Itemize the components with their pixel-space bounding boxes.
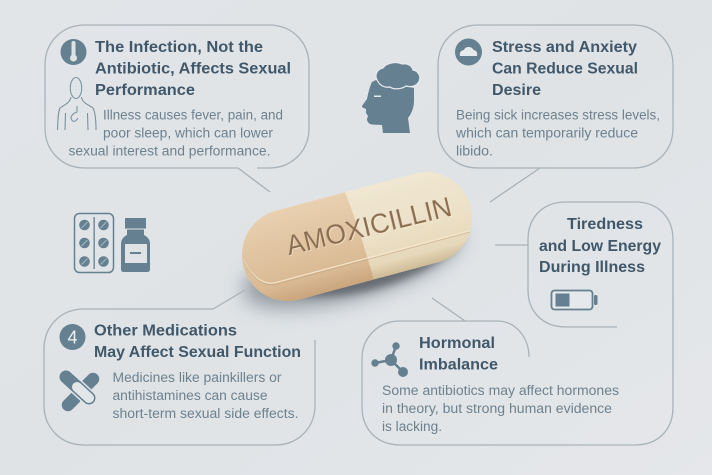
icon: low battery xyxy=(552,290,598,310)
heading: Antibiotic, Affects Sexual xyxy=(95,60,291,78)
heading xyxy=(492,39,638,99)
heading: The Infection, Not the xyxy=(95,39,263,56)
body text: Medicines like painkillers or xyxy=(112,370,282,385)
body text: Some antibiotics may affect hormones xyxy=(382,383,619,398)
heading: Can Reduce Sexual xyxy=(492,60,638,78)
icon: crossed capsules xyxy=(66,377,93,405)
icon: head with cloud xyxy=(362,63,420,133)
panel: stress xyxy=(438,25,673,202)
heading xyxy=(539,216,661,276)
central amoxicillin capsule xyxy=(242,172,472,301)
panel 5 outline xyxy=(362,240,673,445)
heading: and Low Energy xyxy=(539,238,661,255)
heading: Other Medications xyxy=(94,322,237,340)
panel: hormonal xyxy=(362,240,673,445)
heading: Hormonal xyxy=(419,335,495,352)
body text xyxy=(68,108,283,158)
heading: Desire xyxy=(492,82,541,99)
heading xyxy=(419,335,498,374)
panel 4 outline xyxy=(44,290,315,445)
icon: number 4 badge xyxy=(60,324,86,350)
body text: Illness causes fever, pain, and xyxy=(103,108,283,122)
heading: Performance xyxy=(95,82,195,99)
panel: tiredness xyxy=(495,202,673,327)
heading: Tiredness xyxy=(567,216,643,233)
body text: sexual interest and performance. xyxy=(68,144,270,158)
icon: blister pack xyxy=(74,214,114,272)
icon: number 4 badge: 4 xyxy=(67,328,78,348)
body text: is lacking. xyxy=(382,419,442,434)
panel: infection xyxy=(45,25,309,192)
panel: other medications xyxy=(44,290,315,445)
body text: antihistamines can cause xyxy=(112,388,268,403)
body text: libido. xyxy=(456,144,493,158)
icon: thermometer xyxy=(60,39,86,65)
body text: which can temporarily reduce xyxy=(455,126,638,140)
pill shadow xyxy=(235,185,473,326)
body text: short-term sexual side effects. xyxy=(112,406,298,421)
icon: body outline xyxy=(58,78,96,130)
capsule label: AMOXICILLIN xyxy=(283,191,455,261)
heading: During Illness xyxy=(539,259,645,276)
heading xyxy=(95,39,291,99)
heading: May Affect Sexual Function xyxy=(94,344,301,361)
body text: in theory, but strong human evidence xyxy=(382,401,612,416)
body text: poor sleep, which can lower xyxy=(103,126,274,140)
heading xyxy=(94,322,301,361)
heading: Imbalance xyxy=(419,356,498,374)
icon: cloud badge xyxy=(455,38,482,66)
icon: molecule xyxy=(371,342,408,377)
body text xyxy=(112,370,298,421)
panel 1 outline xyxy=(45,25,309,192)
body text: Being sick increases stress levels, xyxy=(456,108,660,122)
heading: Stress and Anxiety xyxy=(492,39,637,56)
panel 3 outline xyxy=(495,202,673,327)
capsule body xyxy=(242,172,472,301)
body text xyxy=(455,108,660,158)
body text xyxy=(382,383,619,434)
icon: medicine bottle xyxy=(121,218,150,272)
panel 2 outline xyxy=(438,25,673,202)
